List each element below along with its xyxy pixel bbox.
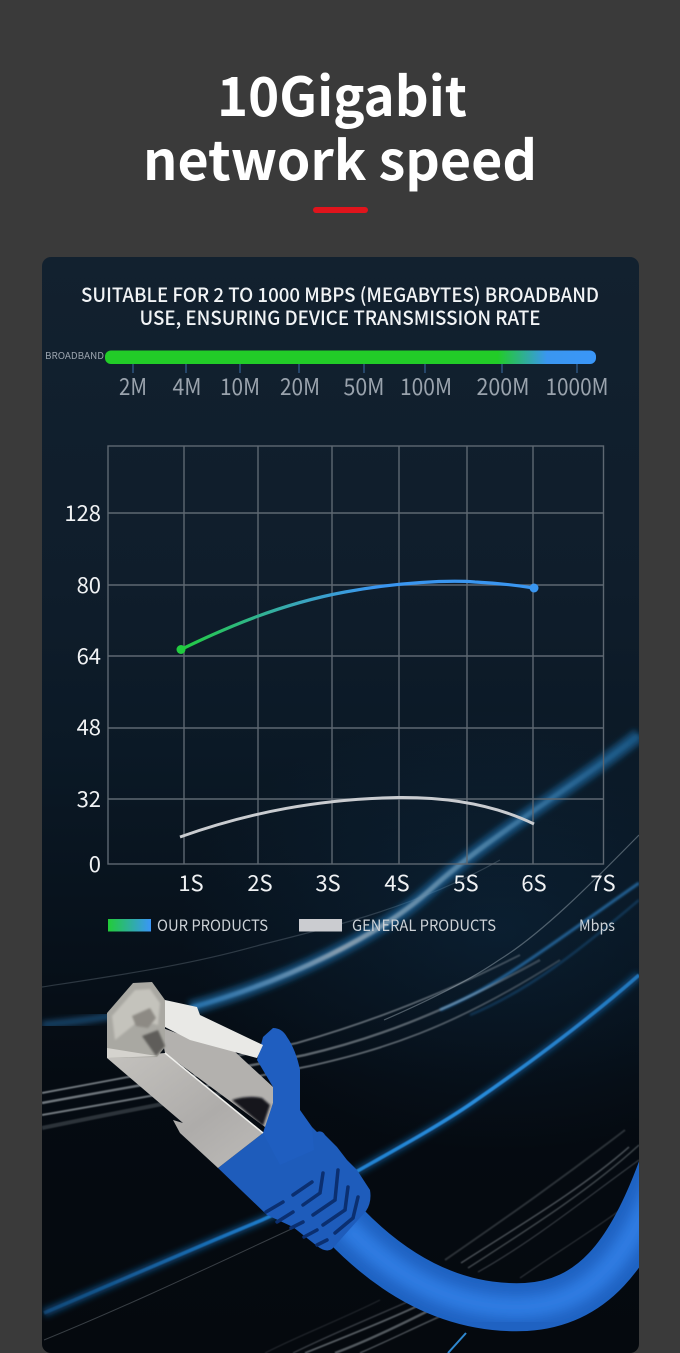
shield front xyxy=(107,1053,263,1168)
scale ticks xyxy=(133,364,577,373)
panel: speed chart and cable xyxy=(42,257,680,1353)
legend xyxy=(108,918,614,934)
shield top plate xyxy=(160,1027,273,1127)
scale labels: 20M xyxy=(280,368,320,402)
boot strain relief xyxy=(218,1127,370,1250)
scale labels: 10M xyxy=(220,368,260,402)
boot slots xyxy=(266,1170,358,1245)
scale labels: 200M xyxy=(476,368,530,402)
x axis labels xyxy=(180,874,615,892)
scale labels: 100M xyxy=(400,368,452,402)
x axis labels: 6S xyxy=(521,866,547,898)
main blue-grey arc xyxy=(190,735,639,1008)
title accent bar xyxy=(313,207,368,213)
grey fan left and right of plug xyxy=(42,955,560,1128)
x axis labels: 4S xyxy=(384,866,410,898)
x axis labels: 3S xyxy=(315,866,341,898)
legend: general products xyxy=(299,919,496,932)
heading: broadband suitability: SUITABLE FOR 2 TO 1000 MBPS (MEGABYTES) BROADBAND xyxy=(81,279,599,308)
title: network speed xyxy=(143,117,537,196)
y axis labels: 0 xyxy=(89,847,101,879)
scale labels xyxy=(120,378,606,396)
scale labels: 2M xyxy=(119,368,147,402)
y axis labels: 128 xyxy=(64,496,101,528)
y axis labels: 32 xyxy=(77,782,101,814)
right blue arcs xyxy=(440,883,639,1010)
broadband gradient bar xyxy=(105,350,596,364)
scale labels: 4M xyxy=(172,368,202,402)
x axis labels: 1S xyxy=(178,866,204,898)
lower blue arc xyxy=(44,975,639,1313)
cable illustration xyxy=(107,982,665,1307)
metal shield xyxy=(107,1027,273,1168)
legend: general products: GENERAL PRODUCTS xyxy=(352,914,496,936)
x axis labels: 2S xyxy=(247,866,273,898)
y axis labels: 48 xyxy=(77,710,101,742)
legend: our products: OUR PRODUCTS xyxy=(157,914,268,936)
grey fan lower centre xyxy=(265,1300,440,1353)
unit label: Mbps xyxy=(579,914,615,936)
left blue glow behind plug xyxy=(42,1015,115,1025)
y axis labels xyxy=(64,496,101,879)
y axis labels: 64 xyxy=(77,639,101,671)
cable body xyxy=(345,1160,665,1307)
x axis labels: 7S xyxy=(590,866,616,898)
shield shadow xyxy=(232,1097,270,1126)
scale labels: 50M xyxy=(344,368,384,402)
legend: our products xyxy=(108,919,268,932)
broadband scale xyxy=(46,350,606,396)
y axis labels: 80 xyxy=(77,568,101,600)
broadband label: BROADBAND xyxy=(45,348,104,362)
grey fan lower right xyxy=(445,1130,639,1278)
title xyxy=(143,53,537,196)
curve: general products xyxy=(180,797,534,837)
heading: broadband suitability: USE, ENSURING DEVICE TRANSMISSION RATE xyxy=(140,302,540,331)
thin arcs xyxy=(42,860,500,987)
latch xyxy=(165,1000,263,1058)
scale labels: 1000M xyxy=(546,368,608,402)
clear plug head xyxy=(107,982,165,1058)
title: 10Gigabit xyxy=(217,53,467,132)
boot clip xyxy=(257,1028,312,1133)
chart grid xyxy=(108,446,604,864)
curve: our products xyxy=(176,581,538,654)
background light streaks xyxy=(42,710,680,1353)
line chart xyxy=(64,446,616,898)
x axis labels: 5S xyxy=(453,866,479,898)
heading: broadband suitability xyxy=(82,286,598,329)
